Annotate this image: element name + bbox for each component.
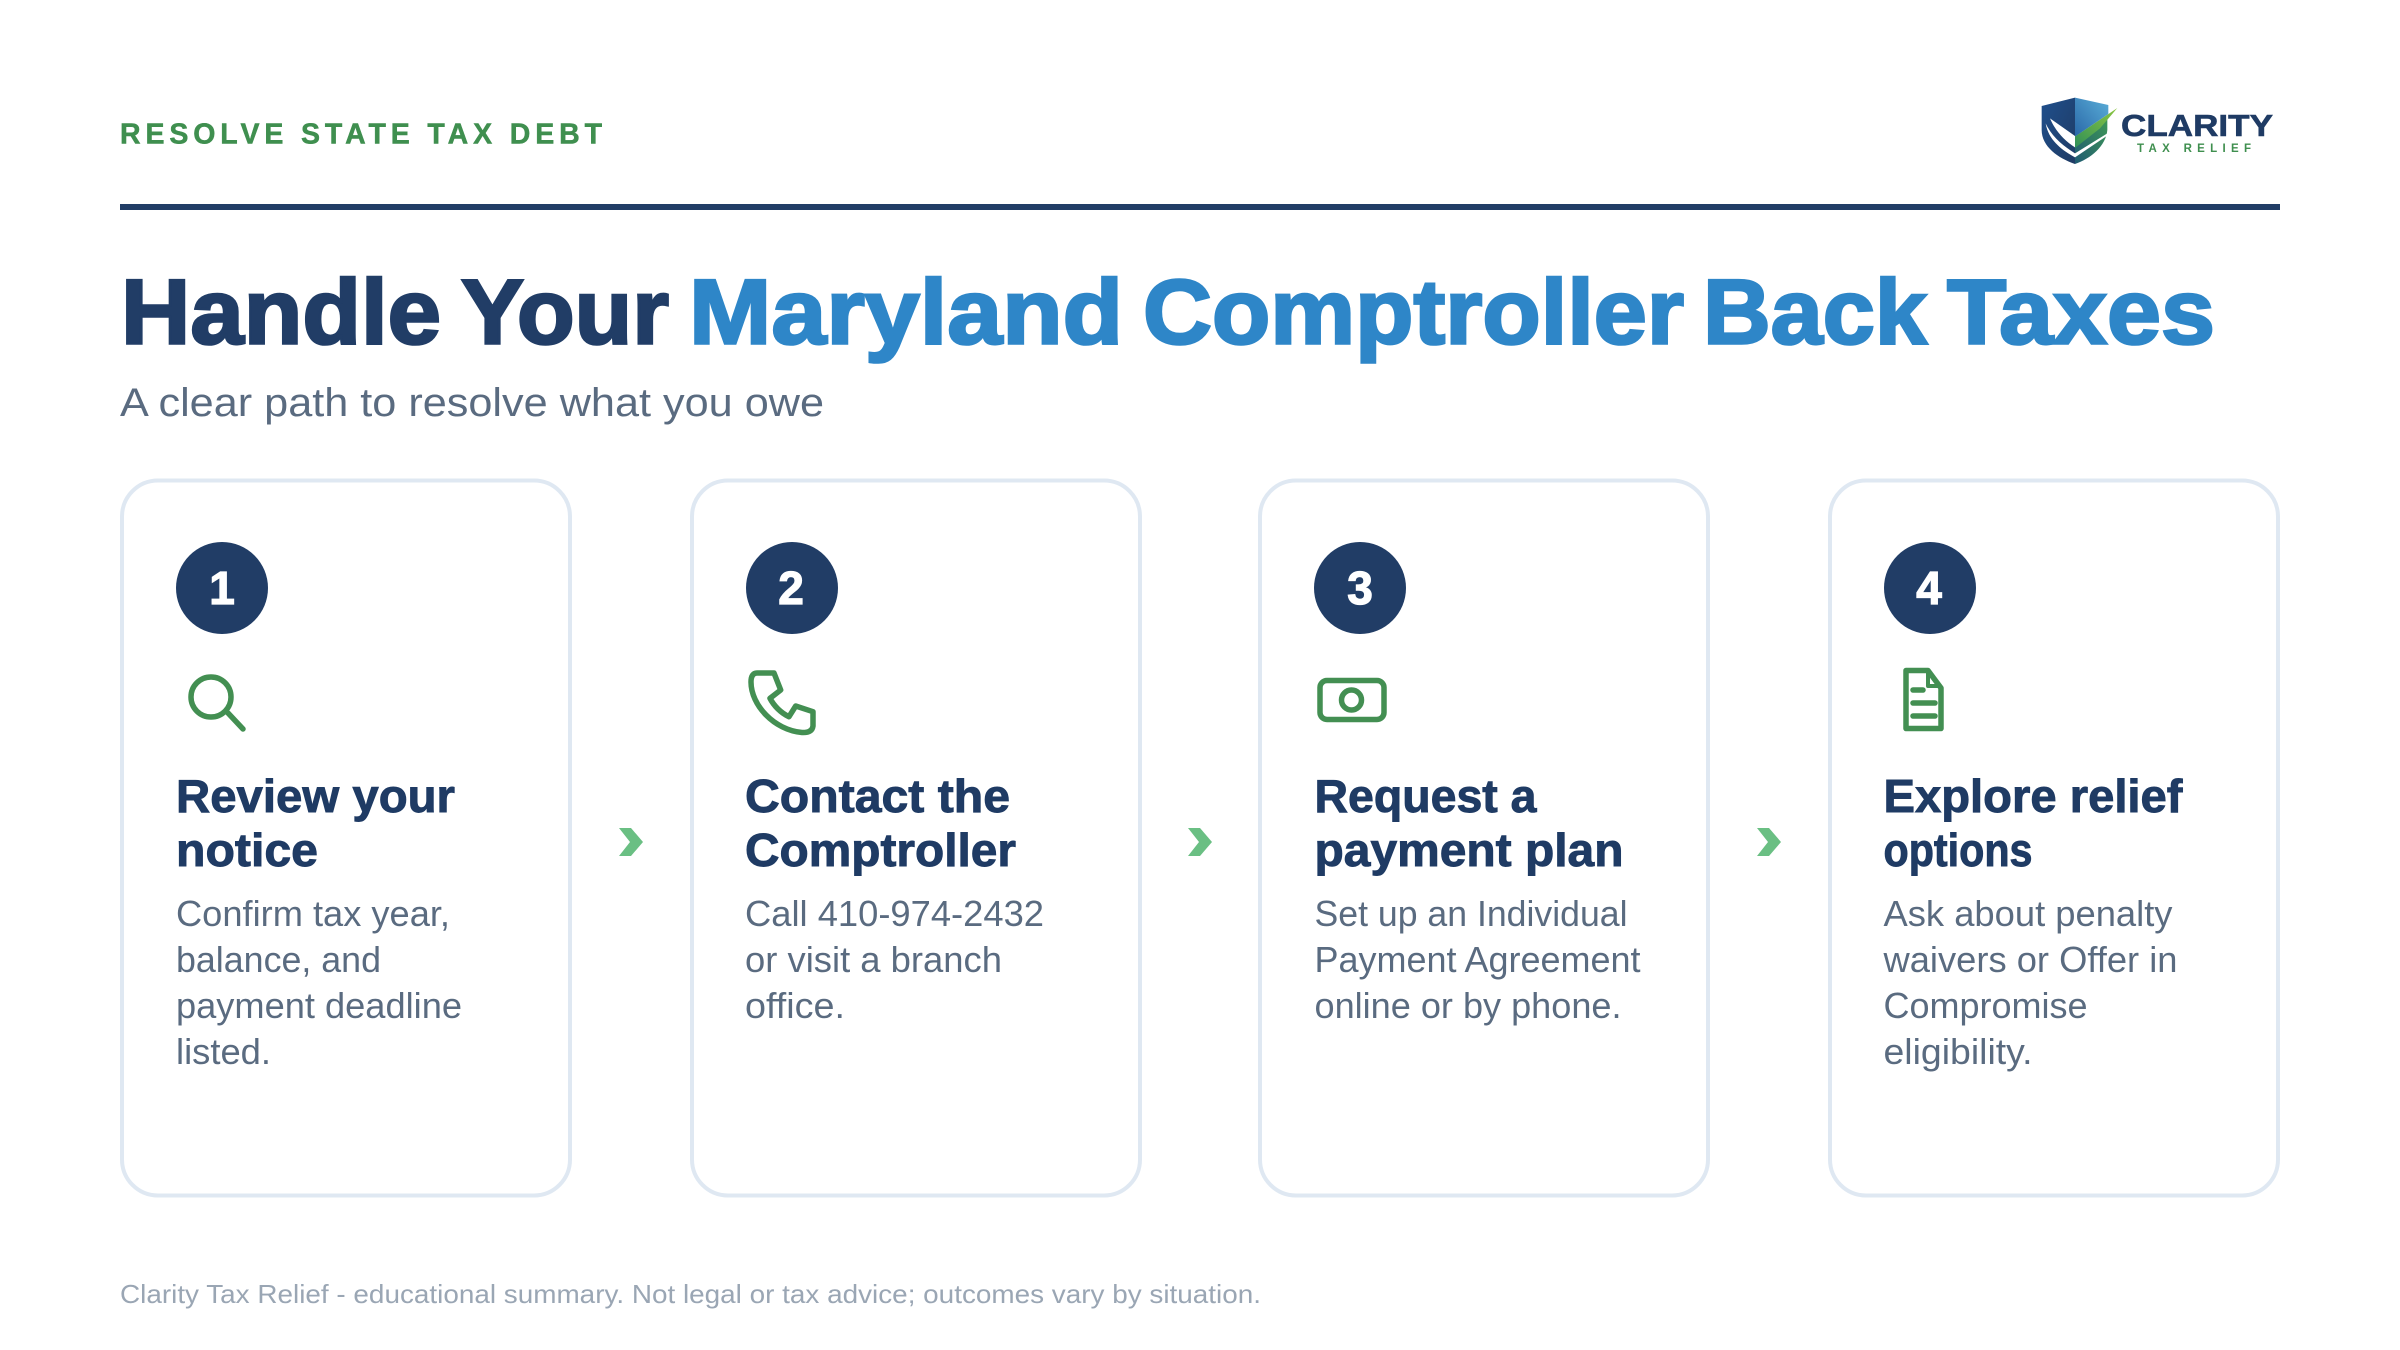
heading: explore relief options xyxy=(1884,770,2183,876)
step number 1: 1 xyxy=(209,562,235,614)
panel: step 2 xyxy=(692,480,1140,1196)
panel: step 1 xyxy=(122,480,570,1196)
description: step 2: office. xyxy=(745,985,845,1026)
step number 3: 3 xyxy=(1347,562,1373,614)
description: step 4: Ask about penalty xyxy=(1884,893,2172,934)
description: step 2: or visit a branch xyxy=(745,939,1002,980)
step number 2 xyxy=(746,542,838,634)
heading: request a payment plan: Request a xyxy=(1314,770,1537,822)
step number 2: 2 xyxy=(778,562,804,614)
description: step 1: Confirm tax year, xyxy=(176,893,450,934)
step number 4: 4 xyxy=(1916,562,1942,614)
eyebrow heading: RESOLVE STATE TAX DEBT xyxy=(120,118,603,150)
description: step 2: Call 410-974-2432 xyxy=(745,893,1044,934)
arrow 1 xyxy=(619,828,643,856)
title: Taxes xyxy=(1947,262,2215,364)
heading: contact the comptroller: Comptroller xyxy=(745,824,1016,876)
description: step 3: Set up an Individual xyxy=(1314,893,1628,934)
logo tagline: TAX RELIEF xyxy=(2137,143,2251,155)
title: Your xyxy=(461,262,669,364)
logo: Clarity Tax Relief xyxy=(2042,98,2273,164)
description: step 1 xyxy=(176,893,462,1072)
heading: explore relief options: options xyxy=(1884,824,2032,876)
description: step 4 xyxy=(1882,893,2178,1072)
heading: explore relief options: Explore relief xyxy=(1884,770,2183,822)
title: Back xyxy=(1703,262,1928,364)
description: step 1: listed. xyxy=(176,1031,271,1072)
arrow 2 xyxy=(1188,828,1212,856)
description: step 4: Compromise xyxy=(1884,985,2088,1026)
description: step 3: online or by phone. xyxy=(1314,985,1622,1026)
heading: review your notice xyxy=(176,770,455,876)
heading: request a payment plan xyxy=(1314,770,1624,876)
icon: banknote xyxy=(1320,680,1384,720)
title: Comptroller xyxy=(1143,262,1684,364)
footer disclaimer: Clarity Tax Relief - educational summary. Not legal or tax advice; outcomes vary by situation. xyxy=(120,1279,1261,1309)
icon: phone xyxy=(751,673,813,733)
icon: shield with check xyxy=(2042,98,2117,164)
header rule xyxy=(120,204,2280,210)
arrow 3 xyxy=(1757,828,1781,856)
description: step 4: eligibility. xyxy=(1884,1031,2032,1072)
step number 4 xyxy=(1884,542,1976,634)
title: Handle xyxy=(121,262,441,364)
logo wordmark: CLARITY xyxy=(2121,108,2273,143)
description: step 3: Payment Agreement xyxy=(1314,939,1640,980)
description: step 4: waivers or Offer in xyxy=(1882,939,2178,980)
description: step 2 xyxy=(745,893,1044,1026)
heading: request a payment plan: payment plan xyxy=(1314,824,1624,876)
description: step 1: balance, and xyxy=(176,939,381,980)
step number 1 xyxy=(176,542,268,634)
title: Maryland xyxy=(689,262,1123,364)
icon: document xyxy=(1906,670,1941,728)
heading: contact the comptroller xyxy=(745,770,1016,876)
panel: step 4 xyxy=(1830,480,2278,1196)
description: step 1: payment deadline xyxy=(176,985,462,1026)
heading: contact the comptroller: Contact the xyxy=(745,770,1010,822)
title xyxy=(121,262,2215,364)
subtitle: A clear path to resolve what you owe xyxy=(120,381,824,425)
icon: magnifying glass xyxy=(191,677,243,729)
step number 3 xyxy=(1314,542,1406,634)
heading: review your notice: Review your xyxy=(176,770,455,822)
description: step 3 xyxy=(1314,893,1640,1026)
panel: step 3 xyxy=(1260,480,1708,1196)
heading: review your notice: notice xyxy=(176,824,318,876)
